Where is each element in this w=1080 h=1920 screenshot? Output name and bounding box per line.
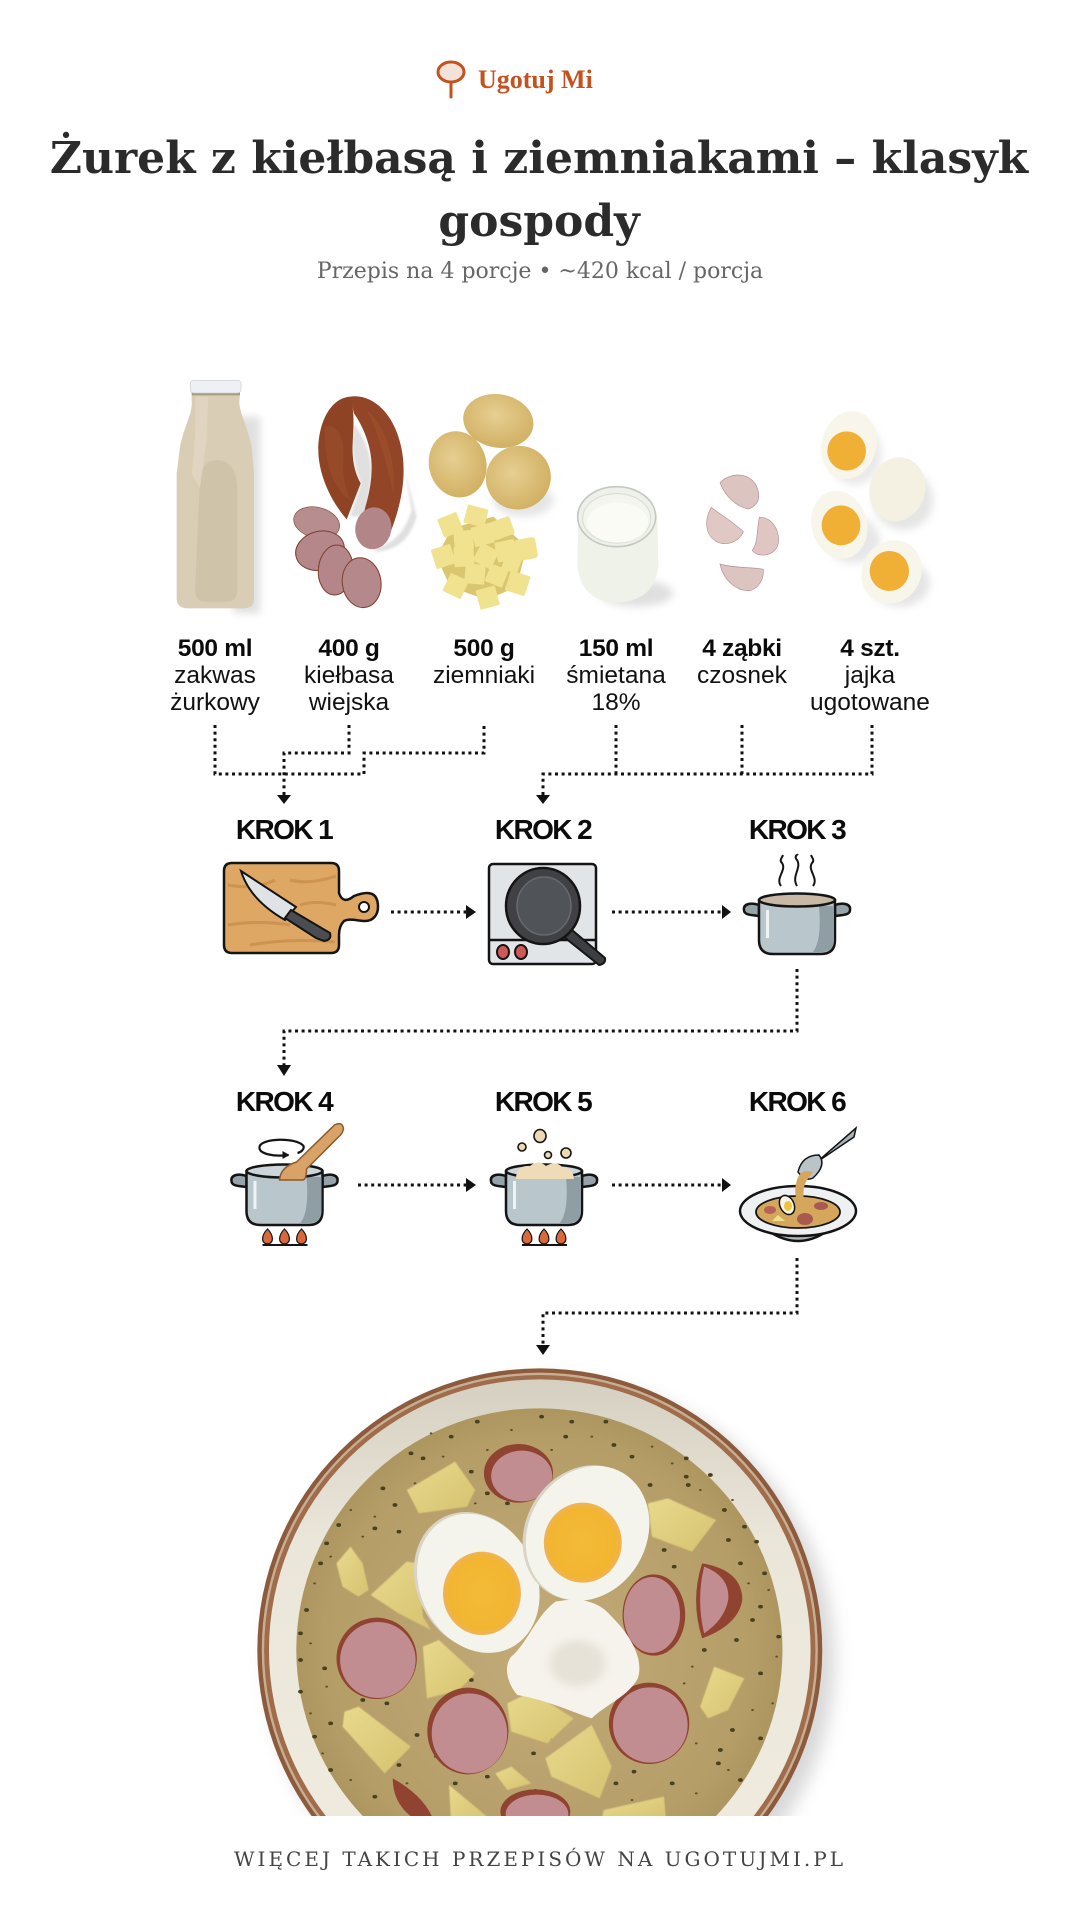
label: kiełbasa xyxy=(304,635,394,716)
label: zakwas: zakwas xyxy=(174,662,256,689)
label: czosnek: 4 ząbki xyxy=(702,635,782,662)
ingredient photo: boiled eggs xyxy=(804,405,933,615)
icon: boiling pot with bubbles xyxy=(491,1130,597,1245)
title xyxy=(50,130,1030,247)
label: śmietana: śmietana xyxy=(566,662,666,689)
arrow: step 2 to 3 xyxy=(612,905,731,919)
label: kiełbasa: 400 g xyxy=(318,635,380,662)
arrow: step 1 to 2 xyxy=(391,905,476,919)
logo: Ugotuj Mi xyxy=(438,62,593,97)
bowl shadow xyxy=(282,1388,842,1816)
title: Żurek z kiełbasą i ziemniakami – klasyk xyxy=(50,130,1030,184)
label: zakwas: 500 ml xyxy=(178,635,252,662)
ingredient photo: garlic cloves xyxy=(707,475,779,591)
herb specks xyxy=(300,1417,779,1797)
icon: logo spoon xyxy=(438,62,464,97)
ingredient labels xyxy=(170,635,930,716)
label: kiełbasa: wiejska xyxy=(308,689,390,716)
label: kiełbasa: kiełbasa xyxy=(304,662,394,689)
label: jajka: jajka xyxy=(844,662,896,689)
heading: KROK 2: KROK 2 xyxy=(495,814,592,845)
label: śmietana: 150 ml xyxy=(579,635,653,662)
icon: pot with steam xyxy=(744,855,850,954)
egg halves xyxy=(414,1512,518,1646)
label: czosnek xyxy=(697,635,788,689)
sausage slices xyxy=(336,1444,742,1834)
footer: WIĘCEJ TAKICH PRZEPISÓW NA UGOTUJMI.PL xyxy=(234,1846,846,1871)
label: ziemniaki: ziemniaki xyxy=(433,662,535,689)
heading: KROK 1: KROK 1 xyxy=(236,814,333,845)
finished dish photo: bowl of żurek xyxy=(257,1368,842,1816)
label: jajka: ugotowane xyxy=(810,689,930,716)
label: jajka xyxy=(810,635,930,716)
label: śmietana: 18% xyxy=(591,689,641,716)
icon: stirring pot on flames xyxy=(231,1124,344,1245)
ingredient photo: sour cream jar xyxy=(577,487,673,607)
icon: cutting board with knife xyxy=(224,863,378,953)
icon: soup bowl with spoon xyxy=(740,1128,856,1241)
heading: KROK 6: KROK 6 xyxy=(749,1086,846,1117)
ingredient photo: smoked sausage xyxy=(290,396,417,610)
soup xyxy=(296,1408,782,1816)
label: czosnek: czosnek xyxy=(697,662,788,689)
ingredient photo: fermented rye starter bottle xyxy=(177,380,260,613)
arrow: step 4 to 5 xyxy=(358,1178,476,1192)
label: ziemniaki: 500 g xyxy=(453,635,515,662)
subtitle: Przepis na 4 porcje • ~420 kcal / porcja xyxy=(317,259,763,284)
arrow: ingredients to step 2 xyxy=(536,725,872,804)
arrow: step 6 to finished dish xyxy=(536,1258,797,1355)
heading: KROK 5: KROK 5 xyxy=(495,1086,592,1117)
logo wordmark: Ugotuj Mi xyxy=(478,65,593,94)
arrow: step 3 to 4 xyxy=(277,969,797,1076)
arrow: ingredients to step 1 xyxy=(215,725,484,804)
arrow: step 5 to 6 xyxy=(612,1178,731,1192)
potato chunks xyxy=(336,1462,744,1820)
label: zakwas xyxy=(170,635,261,716)
heading: KROK 4: KROK 4 xyxy=(236,1086,334,1117)
sour cream xyxy=(507,1600,639,1718)
label: śmietana xyxy=(566,635,666,716)
heading: KROK 3: KROK 3 xyxy=(749,814,846,845)
label: ziemniaki xyxy=(433,635,535,689)
label: zakwas: żurkowy xyxy=(170,689,261,716)
flames xyxy=(263,1229,306,1244)
icon: frying pan on stove xyxy=(489,864,605,965)
ingredient photo: potatoes xyxy=(422,389,561,610)
label: jajka: 4 szt. xyxy=(840,635,900,662)
bowl rim xyxy=(257,1368,822,1816)
title: gospody xyxy=(438,196,641,247)
